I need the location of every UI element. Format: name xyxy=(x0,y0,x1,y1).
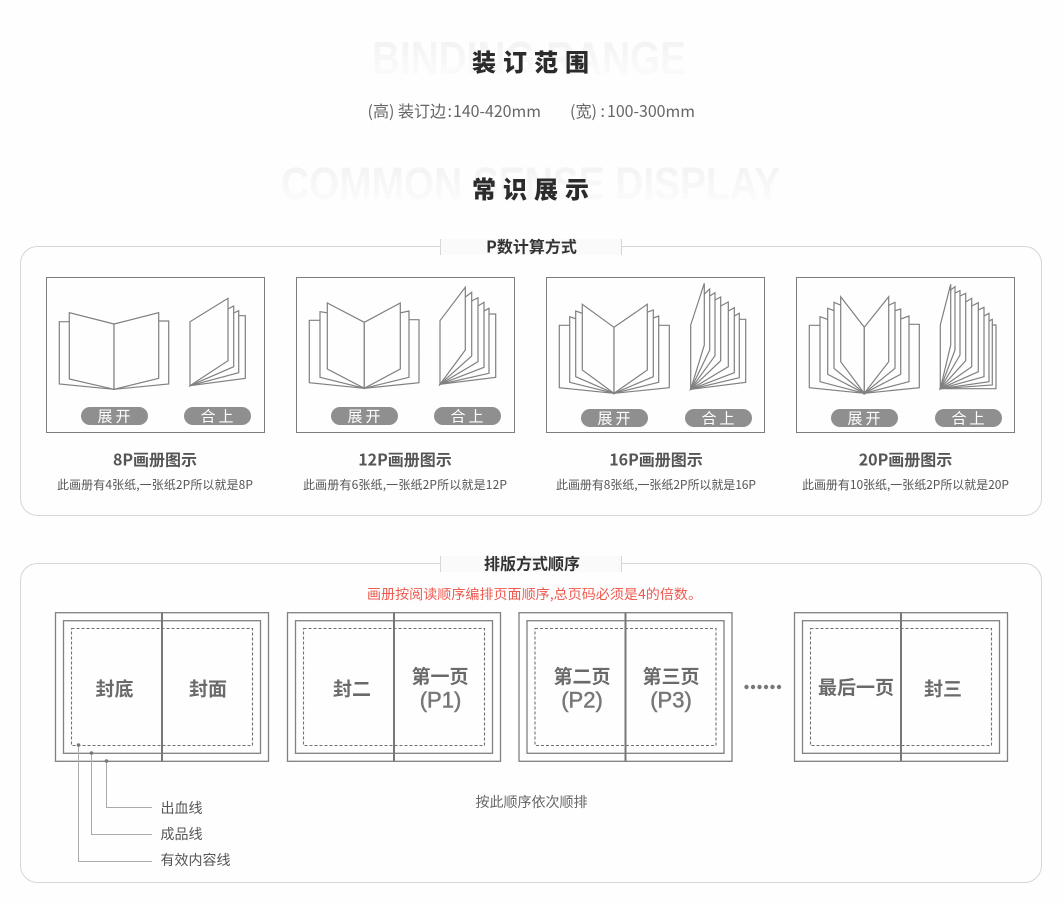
spread: last page and inside back cover xyxy=(794,613,1008,761)
spread: pages 2 and 3: 第二页 xyxy=(553,662,611,689)
order note: 按此顺序依次顺排 xyxy=(476,792,588,812)
icon: 16P open book xyxy=(559,304,669,393)
card: 8P album xyxy=(46,278,264,493)
icon: 8P closed book xyxy=(190,298,245,386)
spread: last page and inside back cover: 封三 xyxy=(924,674,962,702)
ghost title: common sense display: COMMON SENSE DISPLAY xyxy=(281,158,780,209)
spread: pages 2 and 3: (P2) xyxy=(561,688,603,712)
button: 展开 xyxy=(331,406,398,426)
size range text xyxy=(368,98,695,122)
panel: P count calculation xyxy=(20,234,1042,516)
button: 合上 xyxy=(935,408,1002,428)
button: 合上: 合上 xyxy=(951,408,988,428)
size range text: : xyxy=(600,98,605,122)
size range text: 装订边 xyxy=(398,98,446,122)
icon: 20P open book xyxy=(809,297,919,393)
button: 展开 xyxy=(581,408,648,428)
caption: 8P: 8P画册图示 xyxy=(113,446,197,470)
caption: 20P: 20P画册图示 xyxy=(859,446,952,470)
button: 展开: 展开 xyxy=(597,408,634,428)
section: common sense heading xyxy=(281,158,780,209)
section: binding range heading xyxy=(372,32,686,84)
ellipsis dots xyxy=(744,685,781,689)
caption: 8P xyxy=(57,446,253,493)
icon: 12P open book xyxy=(309,303,419,388)
size range text: (高) xyxy=(368,98,394,122)
caption: 12P: 此画册有6张纸,一张纸2P所以就是12P xyxy=(303,476,507,493)
panel heading: P数计算方式 xyxy=(440,234,622,258)
spread: pages 2 and 3: (P3) xyxy=(650,688,692,712)
spread: inside front cover and page 1: 封二 xyxy=(333,674,371,702)
spread: back cover and front cover xyxy=(56,613,268,761)
spread: inside front cover and page 1 xyxy=(288,613,500,761)
heading: 装订范围: 装订范围 xyxy=(472,43,596,78)
button: 合上 xyxy=(434,406,501,426)
spread: inside front cover and page 1: 第一页 xyxy=(411,662,469,689)
panel: imposition order xyxy=(20,550,1042,882)
caption: 12P: 12P画册图示 xyxy=(358,446,452,470)
button: 展开: 展开 xyxy=(847,408,884,428)
spread: back cover and front cover: 封底 xyxy=(95,674,134,702)
caption: 16P xyxy=(556,446,756,493)
size range text: : xyxy=(448,98,452,122)
icon: 16P closed book xyxy=(691,283,746,389)
button: 展开: 展开 xyxy=(347,406,384,426)
red notice: 画册按阅读顺序编排页面顺序,总页码必须是4的倍数。 xyxy=(367,583,702,603)
icon: 20P closed book xyxy=(940,284,996,389)
caption: 8P: 此画册有4张纸,一张纸2P所以就是8P xyxy=(57,476,253,493)
card: 16P album xyxy=(546,278,764,493)
card: 12P album xyxy=(296,278,514,493)
legend: bleed, trim and safe lines xyxy=(77,743,230,870)
spread: last page and inside back cover: 最后一页 xyxy=(818,673,894,700)
panel heading: P数计算方式: P数计算方式 xyxy=(486,234,577,258)
legend: bleed, trim and safe lines: 出血线 xyxy=(160,798,202,818)
button: 展开 xyxy=(831,408,898,428)
icon: 8P open book xyxy=(59,313,169,389)
size range text: 140-420mm xyxy=(453,98,541,122)
spread: pages 2 and 3 xyxy=(519,613,732,761)
spread: pages 2 and 3: 第三页 xyxy=(642,662,700,689)
caption: 12P xyxy=(303,446,507,493)
size range text: 100-300mm xyxy=(607,98,695,122)
button: 合上: 合上 xyxy=(200,406,237,426)
caption: 16P: 此画册有8张纸,一张纸2P所以就是16P xyxy=(556,476,756,493)
button: 合上: 合上 xyxy=(701,408,738,428)
caption: 20P: 此画册有10张纸,一张纸2P所以就是20P xyxy=(802,476,1009,493)
button: 合上 xyxy=(184,406,251,426)
spread: inside front cover and page 1: (P1) xyxy=(420,688,461,712)
size range text: (宽) xyxy=(570,98,597,122)
icon: 12P closed book xyxy=(440,287,496,384)
button: 展开 xyxy=(81,406,148,426)
button: 合上: 合上 xyxy=(450,406,487,426)
caption: 20P xyxy=(802,446,1009,493)
legend: bleed, trim and safe lines: 有效内容线 xyxy=(160,850,230,870)
caption: 16P: 16P画册图示 xyxy=(609,446,703,470)
button: 合上 xyxy=(685,408,752,428)
heading: 常识展示: 常识展示 xyxy=(472,170,596,205)
panel heading: 排版方式顺序: 排版方式顺序 xyxy=(484,550,580,574)
spread: back cover and front cover: 封面 xyxy=(189,674,227,702)
ghost title: binding range: BINDING RANGE xyxy=(372,32,686,84)
button: 展开: 展开 xyxy=(97,406,134,426)
legend: bleed, trim and safe lines: 成品线 xyxy=(160,824,202,844)
panel heading: 排版方式顺序 xyxy=(440,550,622,574)
card: 20P album xyxy=(796,278,1014,493)
